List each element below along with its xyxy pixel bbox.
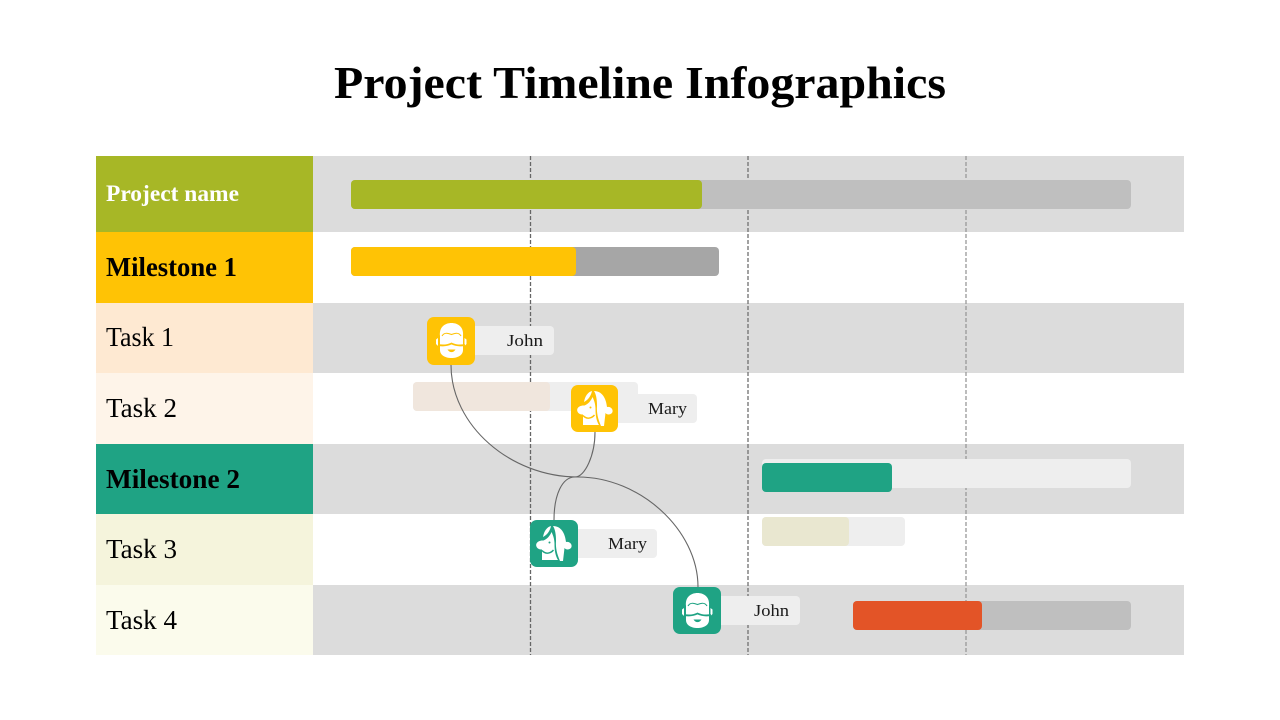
name chip: John (task 1): John (507, 331, 544, 350)
name chip: John (task 4) (711, 596, 800, 625)
timeline row backgrounds (313, 156, 1184, 655)
label cell: milestone 1: Milestone 1 (106, 252, 237, 282)
label cell: task 3 (96, 514, 313, 585)
label cell: task 2: Task 2 (106, 393, 177, 423)
label cell: project name (96, 156, 313, 232)
connector curves between assignees (451, 365, 698, 587)
name chip: Mary (task 2): Mary (648, 399, 688, 418)
label cell: task 1: Task 1 (106, 322, 174, 352)
bar: milestone 2 progress (762, 459, 1131, 492)
label cell: task 4 (96, 585, 313, 655)
name chip: Mary (task 2) (608, 394, 697, 423)
name chip: John (task 1) (465, 326, 554, 355)
bar: task 2 progress (413, 382, 638, 411)
vertical dashed time markers (530, 156, 966, 655)
bar: project progress (351, 180, 1131, 209)
label cell: task 2 (96, 373, 313, 444)
label cell: milestone 1 (96, 232, 313, 303)
name chip: John (task 4): John (754, 601, 790, 620)
icon: John avatar yellow (427, 317, 475, 365)
label cell: project name: Project name (106, 181, 239, 206)
title: Project Timeline Infographics (334, 57, 946, 108)
icon: John avatar green (673, 587, 721, 634)
label cell: task 1 (96, 303, 313, 373)
label cell: task 4: Task 4 (106, 605, 177, 635)
bar: task 3 progress (762, 517, 905, 546)
bar: milestone 1 progress (351, 247, 719, 276)
name chip: Mary (task 3) (568, 529, 657, 558)
label cell: milestone 2: Milestone 2 (106, 464, 240, 494)
icon: Mary avatar green (530, 520, 578, 567)
name chip: Mary (task 3): Mary (608, 534, 648, 553)
icon: Mary avatar yellow (571, 385, 618, 432)
label cell: task 3: Task 3 (106, 534, 177, 564)
bar: task 4 progress (853, 601, 1131, 630)
label cell: milestone 2 (96, 444, 313, 514)
